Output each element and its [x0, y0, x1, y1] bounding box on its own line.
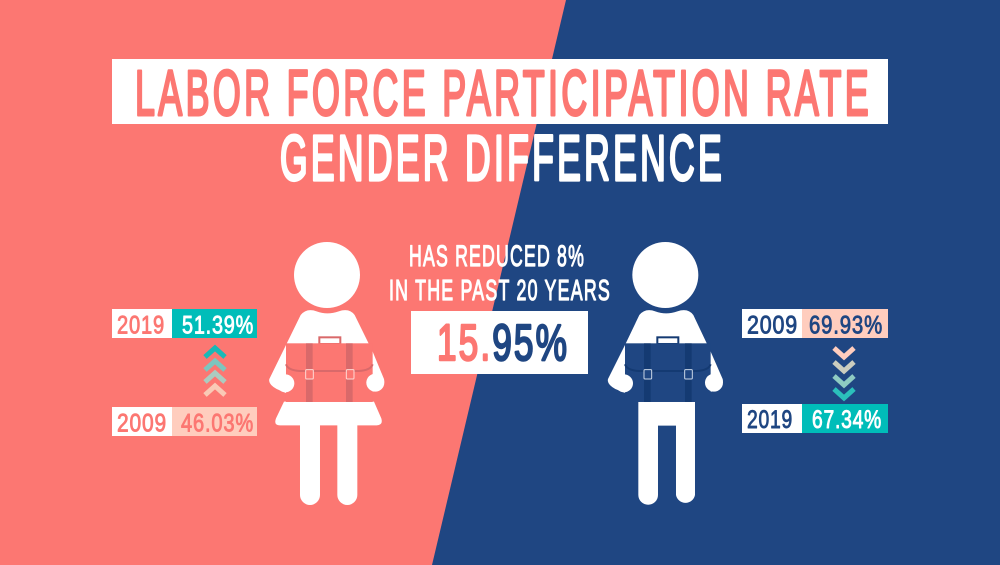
man stat: 2009 69.93%: 69.93%: [809, 312, 883, 340]
woman stat: 2019 51.39%: 51.39%: [182, 312, 254, 340]
woman stat: 2009 46.03%: 2009: [117, 410, 167, 438]
man stat: 2009 69.93%: [742, 309, 888, 340]
man stat: 2019 67.34%: 67.34%: [812, 406, 882, 434]
callout: has reduced text: IN THE PAST 20 YEARS: [389, 275, 611, 307]
background: navy diagonal panel: [432, 0, 1000, 565]
callout: has reduced text: [389, 240, 611, 307]
woman hands: [276, 374, 384, 392]
man head: [632, 242, 698, 308]
callout: 15.95% box: 15.95%: [437, 314, 569, 371]
woman stat: 2019 51.39%: 2019: [117, 312, 165, 340]
man stat: 2019 67.34%: 2019: [747, 406, 793, 434]
woman figure with briefcase: [269, 242, 384, 505]
man hands: [615, 374, 723, 392]
woman skirt: [275, 402, 382, 505]
woman stat: 2009 46.03%: [112, 407, 257, 438]
man stat: 2009 69.93%: 2009: [747, 312, 798, 340]
arrow: chevrons up: [205, 348, 225, 395]
man briefcase: [625, 337, 711, 402]
man torso and arms: [608, 310, 723, 393]
man figure with briefcase: [608, 242, 723, 505]
woman torso and arms: [269, 310, 384, 393]
arrow: chevrons down: [834, 348, 854, 398]
woman stat: 2019 51.39%: [112, 309, 257, 340]
callout: has reduced text: HAS REDUCED 8%: [409, 240, 585, 273]
woman stat: 2009 46.03%: 46.03%: [181, 410, 254, 438]
man legs: [638, 402, 695, 505]
man stat: 2019 67.34%: [742, 404, 888, 434]
woman briefcase: [286, 337, 373, 402]
woman head: [294, 242, 360, 308]
